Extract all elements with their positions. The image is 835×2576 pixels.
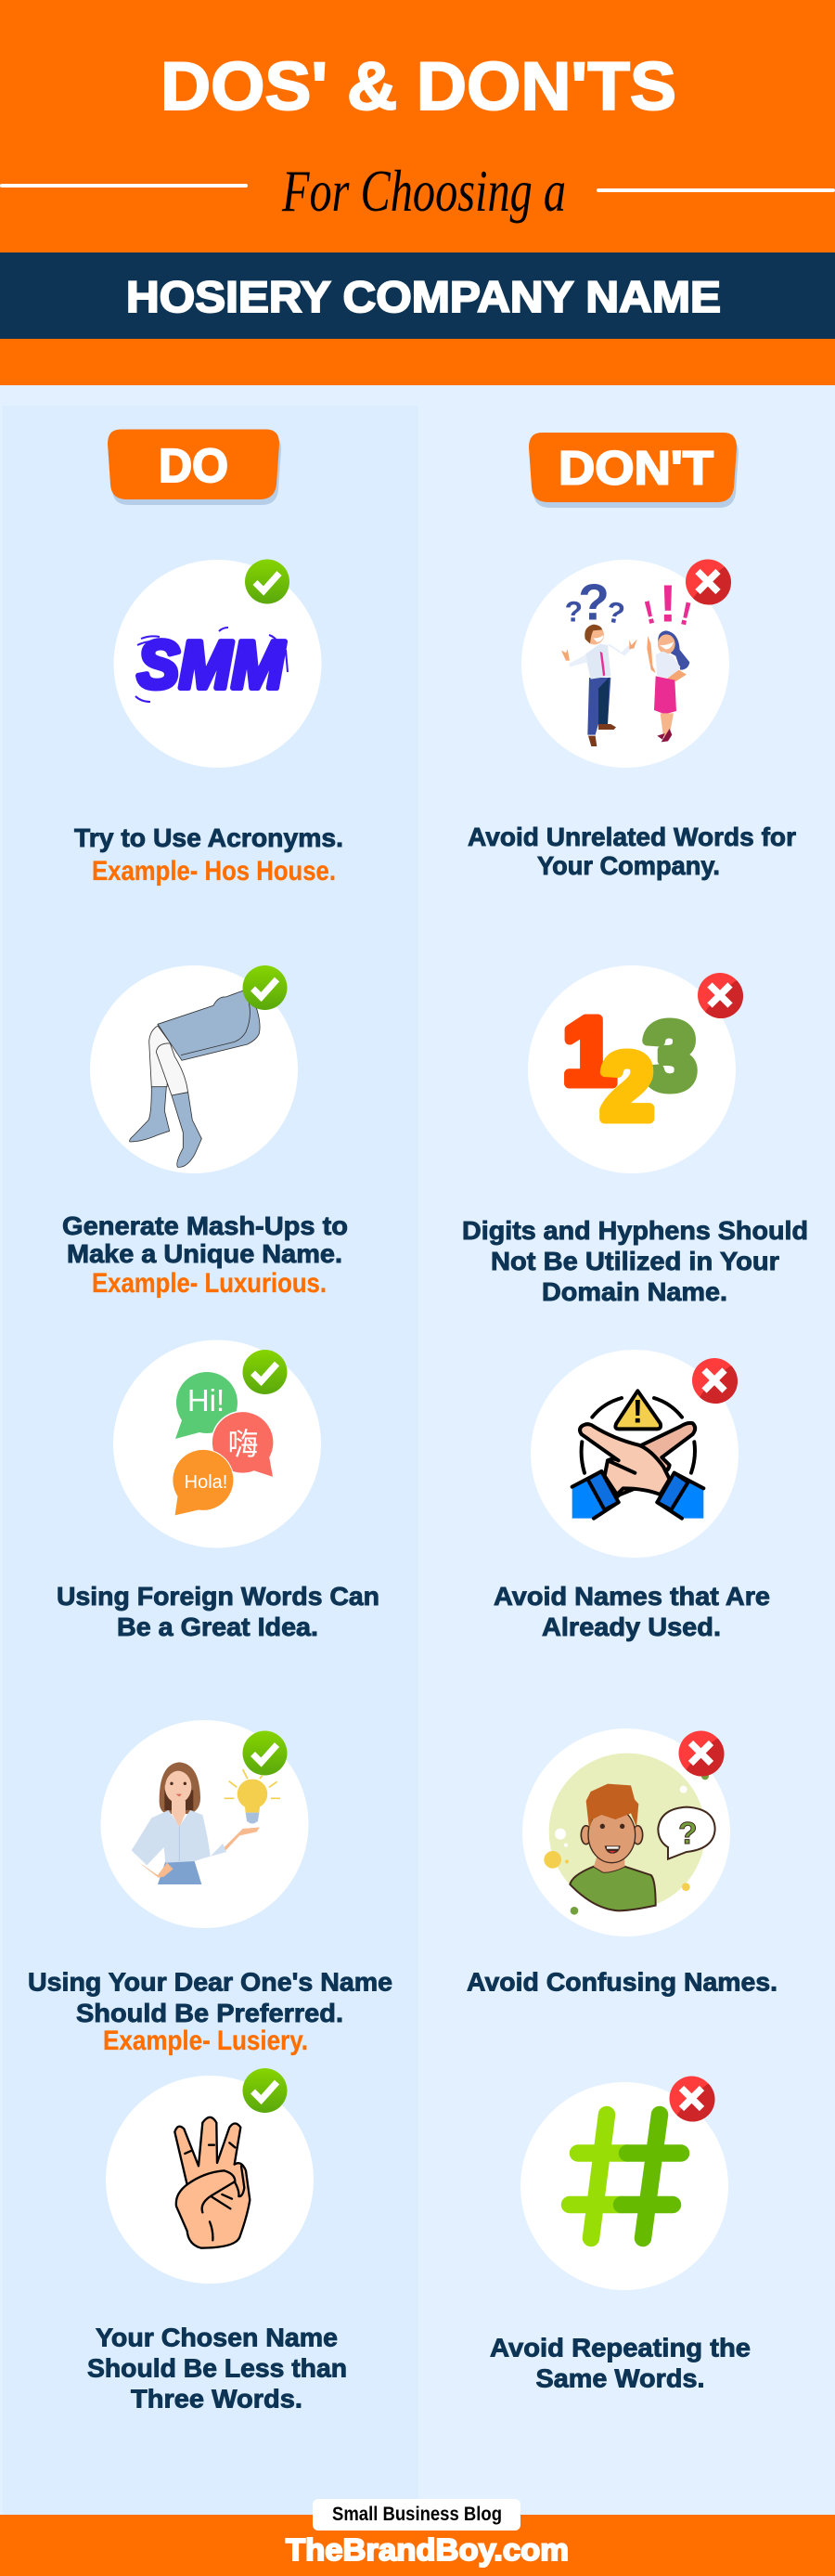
text: confusing names: Avoid Confusing Names. (467, 1968, 777, 1996)
text: fewer words: Three Words. (131, 2384, 302, 2414)
icon: SMM lettering: SMM (137, 628, 286, 703)
icon: confused people: ! (676, 595, 695, 633)
footer brand: TheBrandBoy.com (286, 2532, 569, 2567)
text: already used: Already Used. (542, 1612, 721, 1641)
icon: speech bubbles: 嗨 (228, 1427, 258, 1461)
icon: hashtag (570, 2115, 681, 2238)
cross badge (686, 559, 731, 605)
check badge (243, 965, 288, 1010)
panel: do column (3, 406, 418, 2515)
icon: confused people (561, 573, 695, 746)
icon: confused people: ? (565, 594, 583, 628)
cross badge (670, 2076, 715, 2122)
icon: colourful 123: 1 (563, 1000, 615, 1104)
icon: colourful 123 (563, 1000, 696, 1139)
text: acronyms: Example- Hos House. (92, 856, 336, 887)
do item 5: fewer than three words (87, 2068, 347, 2414)
text: foreign words: Be a Great Idea. (117, 1612, 318, 1641)
icon: confused people: ! (640, 594, 659, 631)
band heading: HOSIERY COMPANY NAME (126, 272, 721, 321)
icon: crossed hands with warning: ! (632, 1394, 643, 1430)
text: already used (494, 1582, 770, 1641)
text: already used: Avoid Names that Are (494, 1582, 770, 1611)
text: unrelated words: Avoid Unrelated Words for (468, 822, 796, 851)
icon: confused people: ? (604, 594, 627, 630)
icon: confused man (544, 1754, 715, 1915)
icon: crossed hands with warning (572, 1391, 703, 1519)
text: dear one's name: Should Be Preferred. (76, 1999, 343, 2027)
text: repeating words: Same Words. (536, 2363, 705, 2393)
text: repeating words (490, 2334, 751, 2393)
don't item 3: already used (494, 1350, 770, 1641)
icon: woman with light bulb (132, 1762, 280, 1884)
do item 4: dear one's name (28, 1720, 392, 2056)
don't item 1: unrelated words (468, 559, 796, 880)
don't item 5: repeating words (490, 2076, 751, 2393)
title: DOS' & DON'TS (161, 49, 676, 124)
icon: speech bubbles: Hola! (185, 1472, 227, 1493)
icon: speech bubbles (173, 1372, 274, 1516)
icon: legs with socks (130, 990, 260, 1167)
footer label: Small Business Blog (332, 2504, 502, 2525)
icon: colourful 123: 3 (644, 1004, 696, 1108)
icon: confused people: ! (660, 575, 676, 633)
cross badge (692, 1358, 738, 1404)
don't item 4: confusing names (467, 1728, 777, 1996)
text: fewer words: Your Chosen Name (96, 2323, 338, 2352)
do item 2: mash-ups (62, 965, 348, 1299)
button: do (108, 429, 281, 505)
icon: three finger hand (174, 2117, 250, 2248)
text: mash-ups: Generate Mash-Ups to (62, 1211, 348, 1240)
text: dear one's name: Example- Lusiery. (103, 2026, 308, 2056)
footer label (313, 2499, 520, 2531)
icon: confused people: ? (578, 573, 610, 630)
button: don't (529, 433, 739, 508)
text: repeating words: Avoid Repeating the (490, 2334, 751, 2362)
subtitle script: For Choosing a (281, 158, 566, 224)
text: digits and hyphens (462, 1216, 808, 1306)
text: digits and hyphens: Not Be Utilized in Your (491, 1247, 779, 1275)
cross badge (679, 1730, 725, 1777)
text: digits and hyphens: Digits and Hyphens Should (462, 1216, 808, 1245)
text: foreign words (57, 1582, 379, 1641)
check badge (243, 1730, 288, 1775)
icon: speech bubbles: Hi! (187, 1383, 225, 1417)
text: dear one's name (28, 1968, 392, 2056)
icon: colourful 123: 2 (601, 1035, 653, 1139)
check badge (243, 2068, 288, 2113)
text: foreign words: Using Foreign Words Can (57, 1582, 379, 1611)
don't item 2: digits and hyphens (462, 965, 808, 1306)
text: digits and hyphens: Domain Name. (542, 1277, 727, 1306)
text: mash-ups: Make a Unique Name. (67, 1239, 342, 1268)
text: fewer words: Should Be Less than (87, 2354, 347, 2382)
text: unrelated words: Your Company. (537, 851, 720, 880)
do item 3: foreign words (57, 1340, 379, 1641)
cross badge (698, 973, 743, 1018)
header band (0, 0, 835, 385)
navy title band (0, 252, 835, 339)
text: mash-ups: Example- Luxurious. (92, 1268, 327, 1299)
text: unrelated words (468, 822, 796, 880)
check badge (243, 1350, 288, 1394)
button: do: DO (159, 439, 228, 492)
button: don't: DON'T (559, 442, 713, 494)
text: fewer words (87, 2323, 347, 2414)
text: acronyms (74, 823, 343, 887)
icon: confused man: ? (678, 1817, 697, 1851)
footer (0, 2499, 835, 2576)
text: acronyms: Try to Use Acronyms. (74, 823, 343, 852)
text: mash-ups (62, 1211, 348, 1299)
check badge (245, 559, 289, 603)
do item 1: acronyms (74, 559, 343, 887)
text: dear one's name: Using Your Dear One's Name (28, 1968, 392, 1996)
